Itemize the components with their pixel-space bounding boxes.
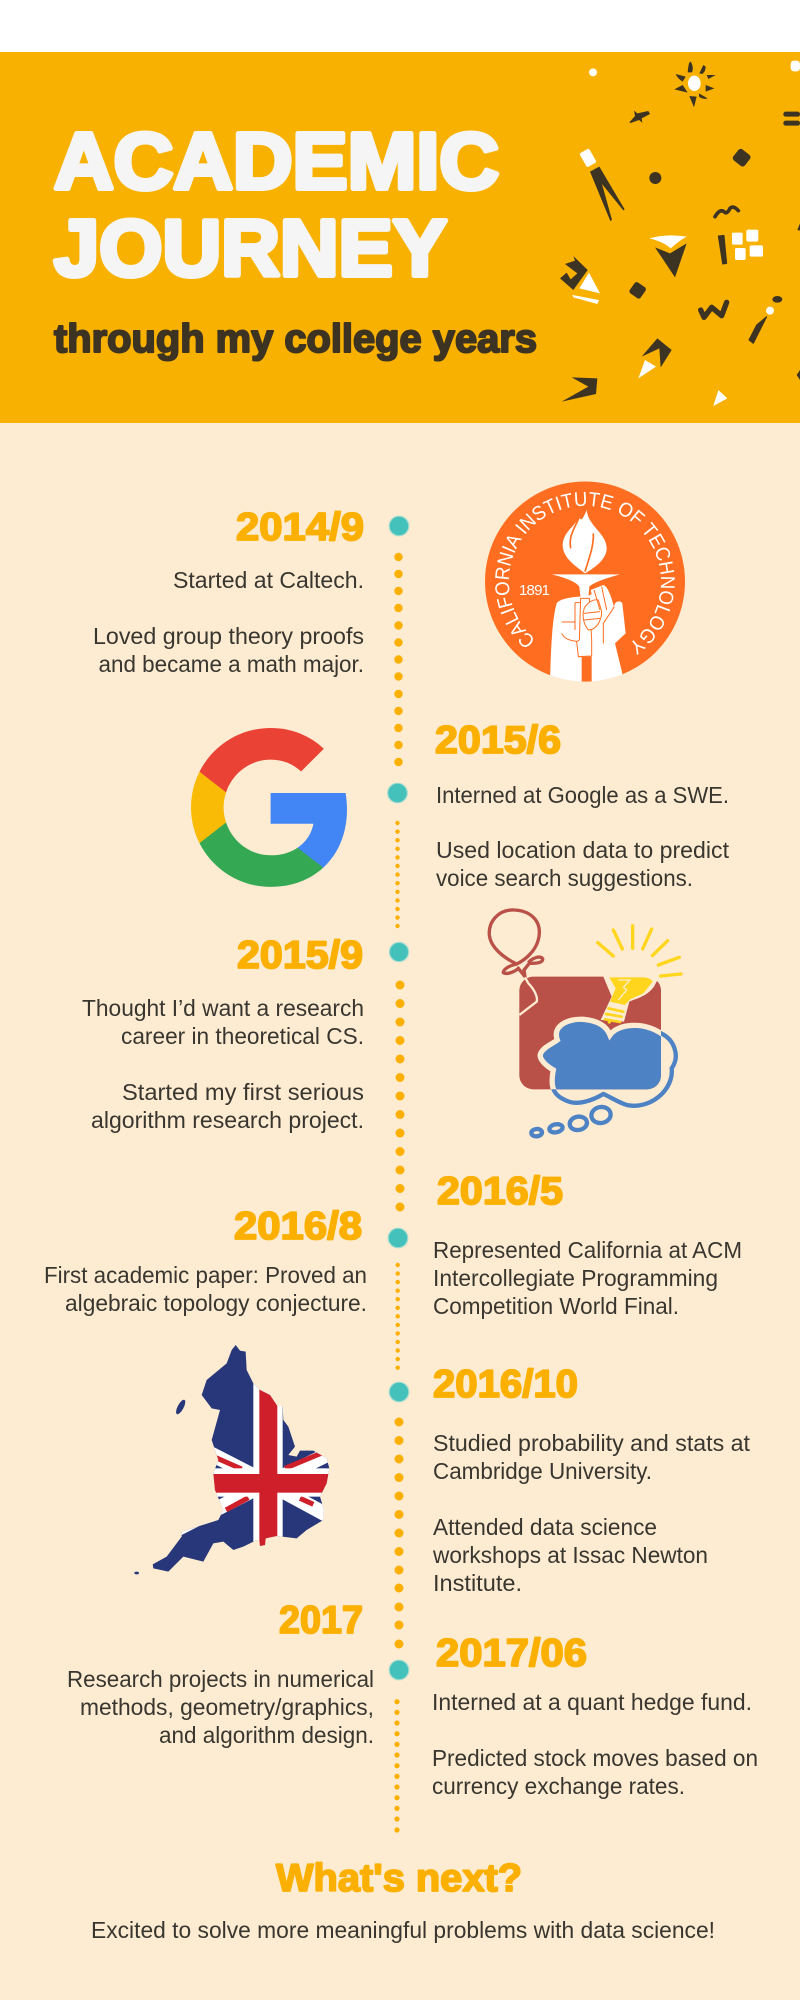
subtitle: through my college years: [54, 317, 537, 361]
text block: [67, 1666, 374, 1748]
year: 2016/5: [437, 1170, 563, 1213]
year: 2015/6: [435, 719, 561, 762]
text block: Thought I’d want a research: [82, 995, 364, 1021]
text block: Used location data to predict: [436, 837, 730, 863]
text block: algorithm research project.: [91, 1107, 364, 1133]
text block: [432, 1430, 751, 1596]
event: 2017/06: [432, 1632, 758, 1799]
text block: [436, 782, 730, 891]
event: 2017: [67, 1599, 374, 1748]
year: 2017/06: [436, 1632, 587, 1675]
event: 2016/10: [432, 1363, 751, 1596]
timeline dots: segment 1: [394, 553, 403, 766]
text block: Loved group theory proofs: [93, 623, 364, 649]
closing text: Excited to solve more meaningful problems with data science!: [91, 1917, 715, 1943]
text block: Started at Caltech.: [173, 567, 364, 593]
event: 2016/5: [433, 1170, 742, 1319]
text block: Research projects in numerical: [67, 1666, 374, 1692]
text block: Attended data science: [433, 1514, 657, 1540]
text block: voice search suggestions.: [436, 865, 693, 891]
text block: Studied probability and stats at: [433, 1430, 751, 1456]
text block: [82, 995, 364, 1133]
text block: Represented California at ACM: [433, 1237, 742, 1263]
text block: and became a math major.: [98, 651, 364, 677]
event: 2014/9: [93, 506, 364, 677]
timeline markers: [388, 516, 409, 1680]
text block: [93, 567, 364, 677]
heading: what's next: What's next?: [276, 1857, 522, 1900]
text block: career in theoretical CS.: [121, 1023, 364, 1049]
text block: and algorithm design.: [159, 1722, 374, 1748]
year: 2016/8: [234, 1205, 362, 1248]
icon: England map with Union Jack: [133, 1340, 340, 1580]
event: 2016/8: [44, 1205, 367, 1316]
text block: Started my first serious: [122, 1079, 364, 1105]
text block: Cambridge University.: [433, 1458, 652, 1484]
text block: [44, 1262, 367, 1316]
icon: Caltech seal: 1891: [519, 582, 550, 599]
icon: scattered doodles: [560, 61, 800, 406]
panel: header banner: [0, 52, 800, 423]
text block: currency exchange rates.: [432, 1773, 685, 1799]
timeline dots: segment 2: [395, 821, 400, 928]
text block: First academic paper: Proved an: [44, 1262, 367, 1288]
timeline dots: segment 6: [394, 1699, 400, 1833]
year: 2015/9: [237, 934, 363, 977]
text block: methods, geometry/graphics,: [80, 1694, 374, 1720]
icon: balloon, bulb and thought cloud: [489, 910, 681, 1137]
event: 2015/9: [82, 934, 364, 1133]
year: 2017: [279, 1599, 363, 1642]
text block: Predicted stock moves based on: [432, 1745, 758, 1771]
title: ACADEMIC: [54, 116, 499, 206]
timeline dots: segment 4: [396, 1263, 400, 1370]
text block: algebraic topology conjecture.: [65, 1290, 367, 1316]
text block: Institute.: [433, 1570, 522, 1596]
event: 2015/6: [435, 719, 730, 891]
text block: [432, 1689, 758, 1799]
text block: [433, 1237, 742, 1319]
text block: Interned at a quant hedge fund.: [432, 1689, 752, 1715]
year: 2014/9: [236, 506, 364, 549]
timeline dots: segment 5: [394, 1418, 404, 1648]
title: JOURNEY: [54, 204, 447, 292]
title: [54, 116, 499, 292]
timeline dots: segment 3: [396, 980, 404, 1212]
text block: workshops at Issac Newton: [432, 1542, 708, 1568]
icon: Caltech seal: CALIFORNIA INSTITUTE OF TECHNOLOGY: [495, 492, 675, 656]
text block: Intercollegiate Programming: [433, 1265, 718, 1291]
text block: Interned at Google as a SWE.: [436, 782, 729, 808]
text block: Competition World Final.: [433, 1293, 679, 1319]
icon: Google G: [191, 728, 347, 887]
year: 2016/10: [433, 1363, 578, 1406]
